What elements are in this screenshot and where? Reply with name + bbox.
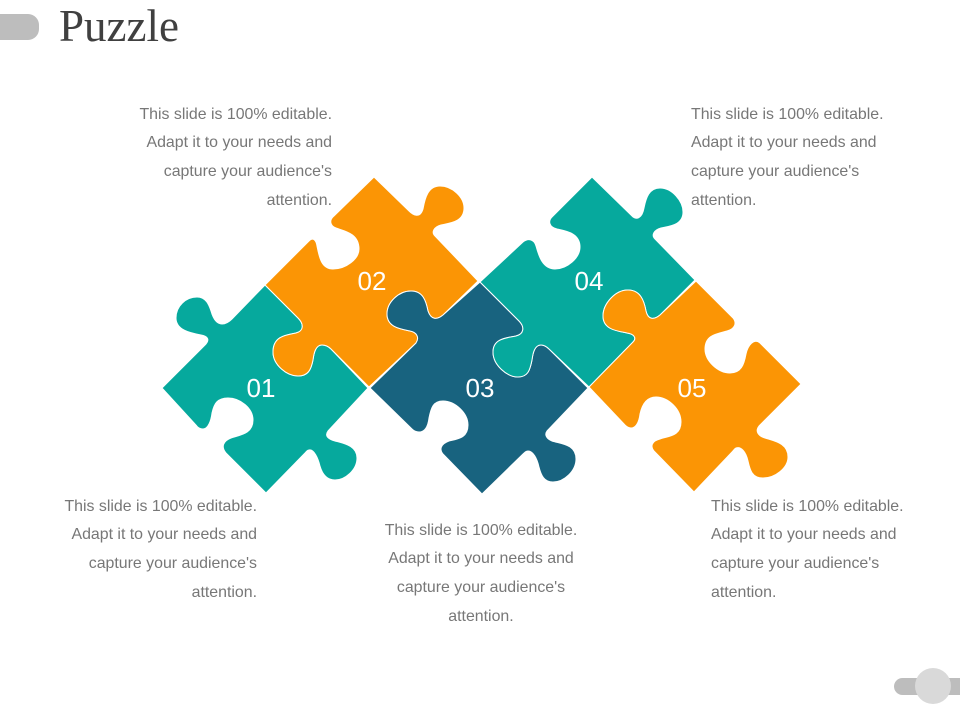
footer slider bar xyxy=(894,678,960,695)
text block: bottom left: Adapt it to your needs and xyxy=(71,526,257,543)
text block: bottom right: attention. xyxy=(711,584,776,601)
text block: bottom left: This slide is 100% editable. xyxy=(64,498,257,515)
title accent pill xyxy=(0,14,39,40)
puzzle piece 02: 02 xyxy=(358,266,386,296)
text block: top left xyxy=(139,106,332,209)
text block: bottom right: Adapt it to your needs and xyxy=(711,526,897,543)
text block: top left: Adapt it to your needs and xyxy=(146,134,332,151)
puzzle piece 04 xyxy=(480,177,695,387)
puzzle piece 02 xyxy=(265,177,478,387)
text block: top right: This slide is 100% editable. xyxy=(691,106,884,123)
text block: bottom center: capture your audience's xyxy=(397,579,565,596)
text block: top left: attention. xyxy=(267,192,332,209)
text block: top right: attention. xyxy=(691,192,756,209)
text block: bottom right: capture your audience's xyxy=(711,555,879,572)
text block: bottom center xyxy=(385,522,577,625)
puzzle piece 01: 01 xyxy=(247,373,275,403)
text block: bottom left xyxy=(64,498,257,601)
text block: top right xyxy=(691,106,884,209)
text block: bottom center: attention. xyxy=(448,608,514,625)
footer slider knob xyxy=(915,668,951,704)
puzzle piece 05 xyxy=(589,281,801,492)
text block: bottom left: attention. xyxy=(192,584,257,601)
text block: top left: This slide is 100% editable. xyxy=(139,106,332,123)
puzzle piece 04: 04 xyxy=(575,266,603,296)
text block: bottom left: capture your audience's xyxy=(89,555,257,572)
text block: top left: capture your audience's xyxy=(164,163,332,180)
puzzle piece 01 xyxy=(162,285,368,493)
puzzle piece 03 xyxy=(370,282,588,494)
puzzle piece 03: 03 xyxy=(466,373,494,403)
text block: bottom center: Adapt it to your needs and xyxy=(388,550,574,567)
text block: top right: Adapt it to your needs and xyxy=(691,134,877,151)
text block: bottom right xyxy=(711,498,904,601)
text block: top right: capture your audience's xyxy=(691,163,859,180)
text block: bottom center: This slide is 100% editable. xyxy=(385,522,577,539)
text block: bottom right: This slide is 100% editable. xyxy=(711,498,904,515)
title: Puzzle xyxy=(59,1,179,51)
puzzle piece 05: 05 xyxy=(678,373,706,403)
